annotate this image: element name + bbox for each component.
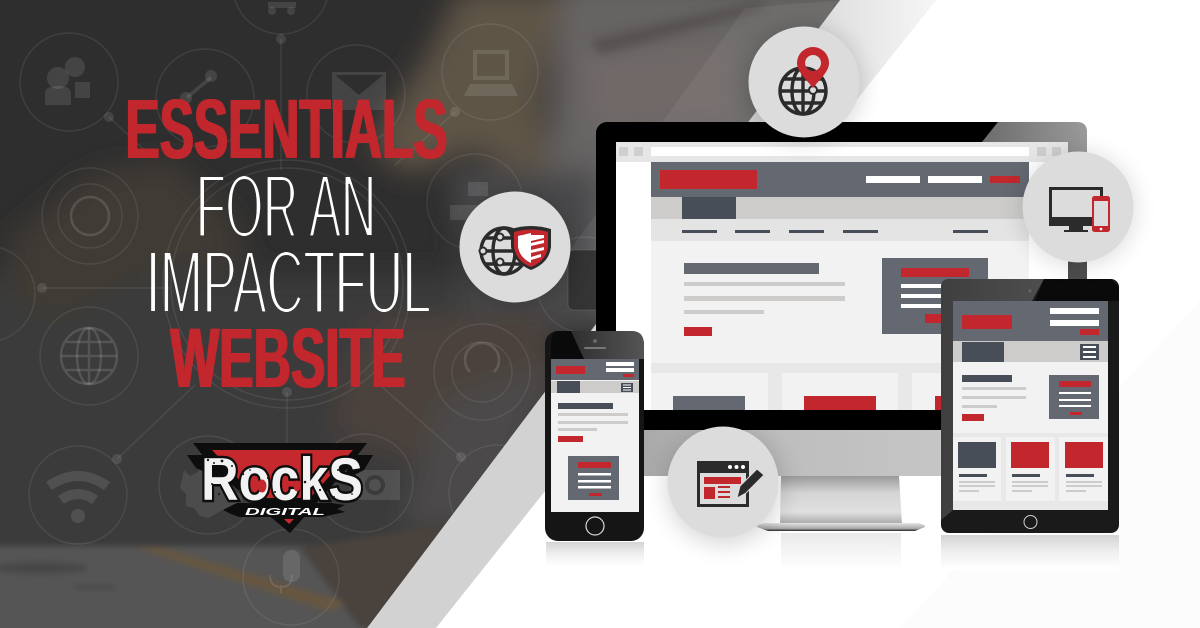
logo: Rocks Digital [187, 443, 373, 533]
monitor right lower bezel [1068, 258, 1087, 282]
grey diagonal band highlight at top [748, 0, 936, 122]
heading: WEBSITE: WEBSITE [170, 311, 406, 405]
logo: Rocks Digital: RockS [201, 446, 363, 513]
heading: FOR AN: FOR AN [196, 157, 376, 257]
logo: Rocks Digital: DIGITAL [245, 507, 325, 518]
grey diagonal band [367, 0, 936, 628]
icon circle: web editor with pencil [666, 426, 782, 544]
monitor bezel [596, 122, 1087, 430]
website nav strip [651, 219, 1029, 241]
faint globe and cycle icons [61, 197, 499, 593]
lighter diagonal overlay on photo [570, 0, 842, 255]
website header [651, 162, 1029, 197]
monitor top right glare [982, 122, 1087, 165]
tablet hamburger menu [1080, 344, 1099, 360]
icon circle: desktop and mobile [1022, 152, 1134, 265]
browser bar [616, 142, 1068, 162]
monitor stand [757, 476, 925, 569]
monitor [596, 122, 1087, 569]
website tab band [651, 197, 1029, 219]
phone hamburger menu [621, 383, 633, 392]
website main content [651, 241, 1029, 410]
tablet screen [953, 301, 1108, 510]
tablet reflection [941, 535, 1119, 569]
faint icon glyphs and connector dots [37, 2, 518, 582]
title [126, 82, 448, 405]
logo distress speckles [207, 459, 353, 498]
phone [545, 331, 644, 541]
blurred photo background [0, 0, 860, 628]
tablet home button [1024, 516, 1037, 528]
light diagonal accent, bottom right [900, 300, 1200, 628]
faint network of icons over photo [0, 0, 633, 625]
heading: IMPACTFUL: IMPACTFUL [146, 233, 431, 333]
monitor chin [640, 429, 1087, 476]
website side card [882, 258, 988, 334]
website lower cards [651, 363, 1029, 410]
icon circle: location pin on globe [748, 26, 860, 140]
heading: ESSENTIALS: ESSENTIALS [126, 82, 448, 176]
phone reflection [546, 542, 644, 566]
phone home button [586, 517, 604, 535]
tablet [941, 279, 1119, 533]
faint phone glyph [568, 250, 602, 310]
icon circle: shield over globe [459, 192, 571, 305]
phone screen [551, 359, 639, 512]
monitor screen [616, 142, 1068, 410]
